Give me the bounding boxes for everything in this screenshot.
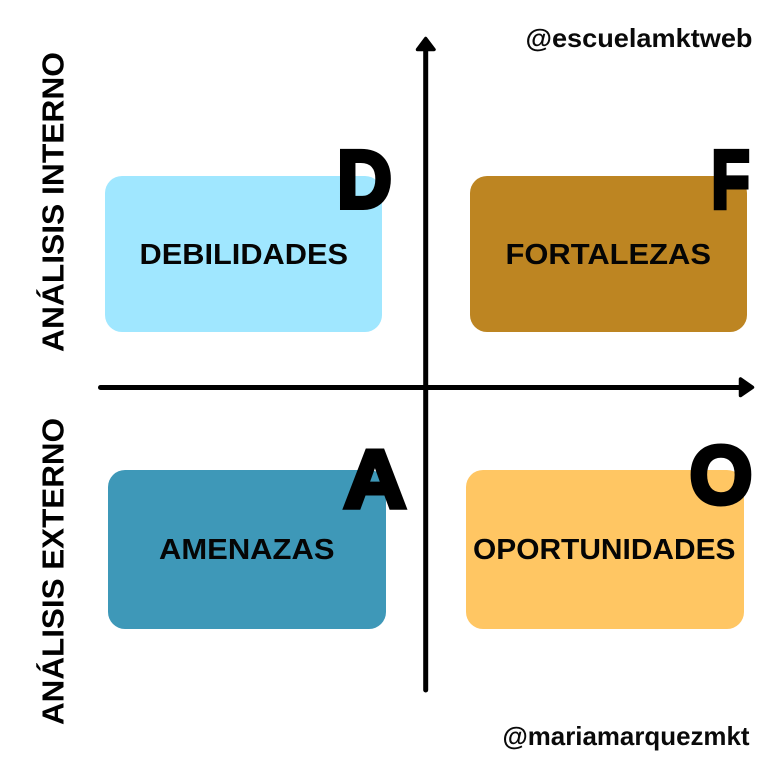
panel: oportunidades [466,470,744,629]
letter D: D [337,134,392,225]
vertical axis arrow [418,38,434,690]
side heading: analisis externo: ANÁLISIS EXTERNO [36,418,70,725]
panel: fortalezas [470,176,747,332]
label: amenazas: AMENAZAS [159,534,334,566]
handle: escuelamktweb: @escuelamktweb [526,23,752,53]
panel: debilidades [105,176,382,332]
letter A: A [344,433,406,525]
label: fortalezas: FORTALEZAS [506,239,711,271]
letter F: F [711,134,750,226]
handle: mariamarquezmkt: @mariamarquezmkt [502,721,750,751]
label: oportunidades: OPORTUNIDADES [473,534,736,566]
label: debilidades: DEBILIDADES [140,239,348,271]
letter O: O [690,430,752,521]
horizontal axis arrow [100,379,752,396]
side heading: analisis interno: ANÁLISIS INTERNO [36,52,70,352]
panel: amenazas [108,470,386,629]
